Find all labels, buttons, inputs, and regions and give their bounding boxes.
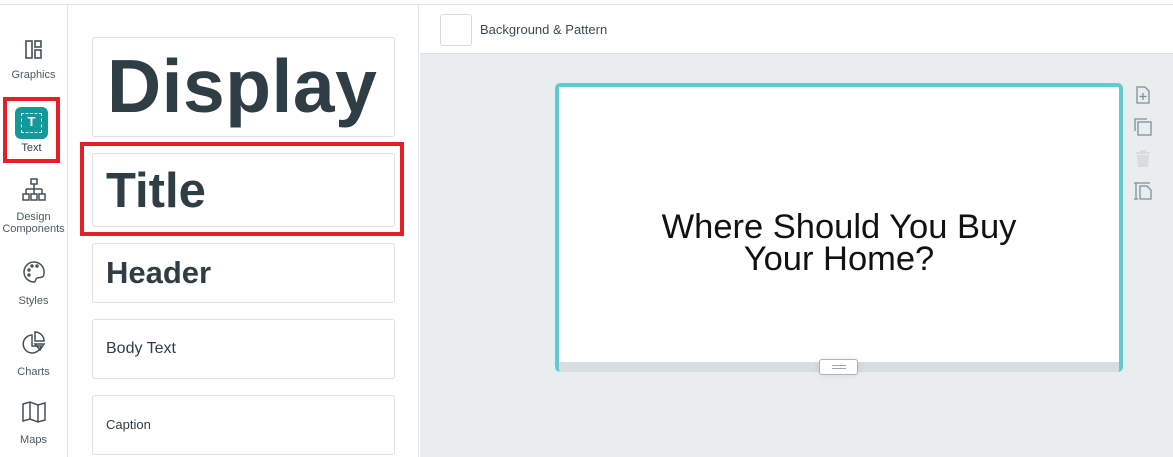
left sidebar (0, 5, 68, 457)
style: caption: Caption (106, 417, 151, 432)
style: body text: Body Text (106, 340, 176, 357)
highlight: title (80, 142, 404, 236)
style: header (92, 243, 395, 303)
style: title: Title (106, 164, 206, 218)
nav: design components: Components (2, 223, 65, 235)
style: title (92, 153, 395, 227)
panel: text styles (68, 5, 419, 457)
nav: design components: Design (16, 211, 51, 223)
nav: maps: Maps (20, 434, 47, 446)
swatch (440, 14, 472, 46)
nav: styles (19, 261, 48, 307)
label: Background & Pattern (480, 22, 607, 37)
top bar: background & pattern (420, 5, 1173, 54)
top border line (0, 4, 1173, 5)
canvas title (662, 208, 1016, 278)
icon: duplicate (1134, 118, 1152, 136)
nav: graphics (11, 40, 56, 81)
canvas (555, 83, 1123, 372)
canvas title: Your Home? (744, 240, 934, 278)
bottom strip (555, 362, 1123, 376)
style: caption (92, 395, 395, 455)
canvas tools (1134, 86, 1152, 200)
nav: design components (2, 178, 65, 235)
nav: styles: Styles (19, 295, 48, 307)
nav: charts: Charts (17, 366, 50, 378)
icon: delete (1136, 150, 1150, 167)
icon: add page (1136, 86, 1150, 104)
nav: graphics: Graphics (11, 69, 56, 81)
nav: text (selected) (3, 97, 60, 163)
nav: text (selected): Text (21, 142, 42, 154)
icon: text: T (28, 114, 35, 129)
nav: maps (20, 401, 47, 446)
style: body text (92, 319, 395, 379)
canvas title: Where Should You Buy (662, 208, 1016, 246)
style: header: Header (106, 255, 211, 290)
icon: insert page (1134, 182, 1152, 200)
icon: text (15, 107, 48, 139)
style: display: Display (107, 44, 377, 128)
workspace (420, 54, 1173, 457)
resize handle (819, 359, 858, 375)
nav: charts (17, 331, 50, 378)
